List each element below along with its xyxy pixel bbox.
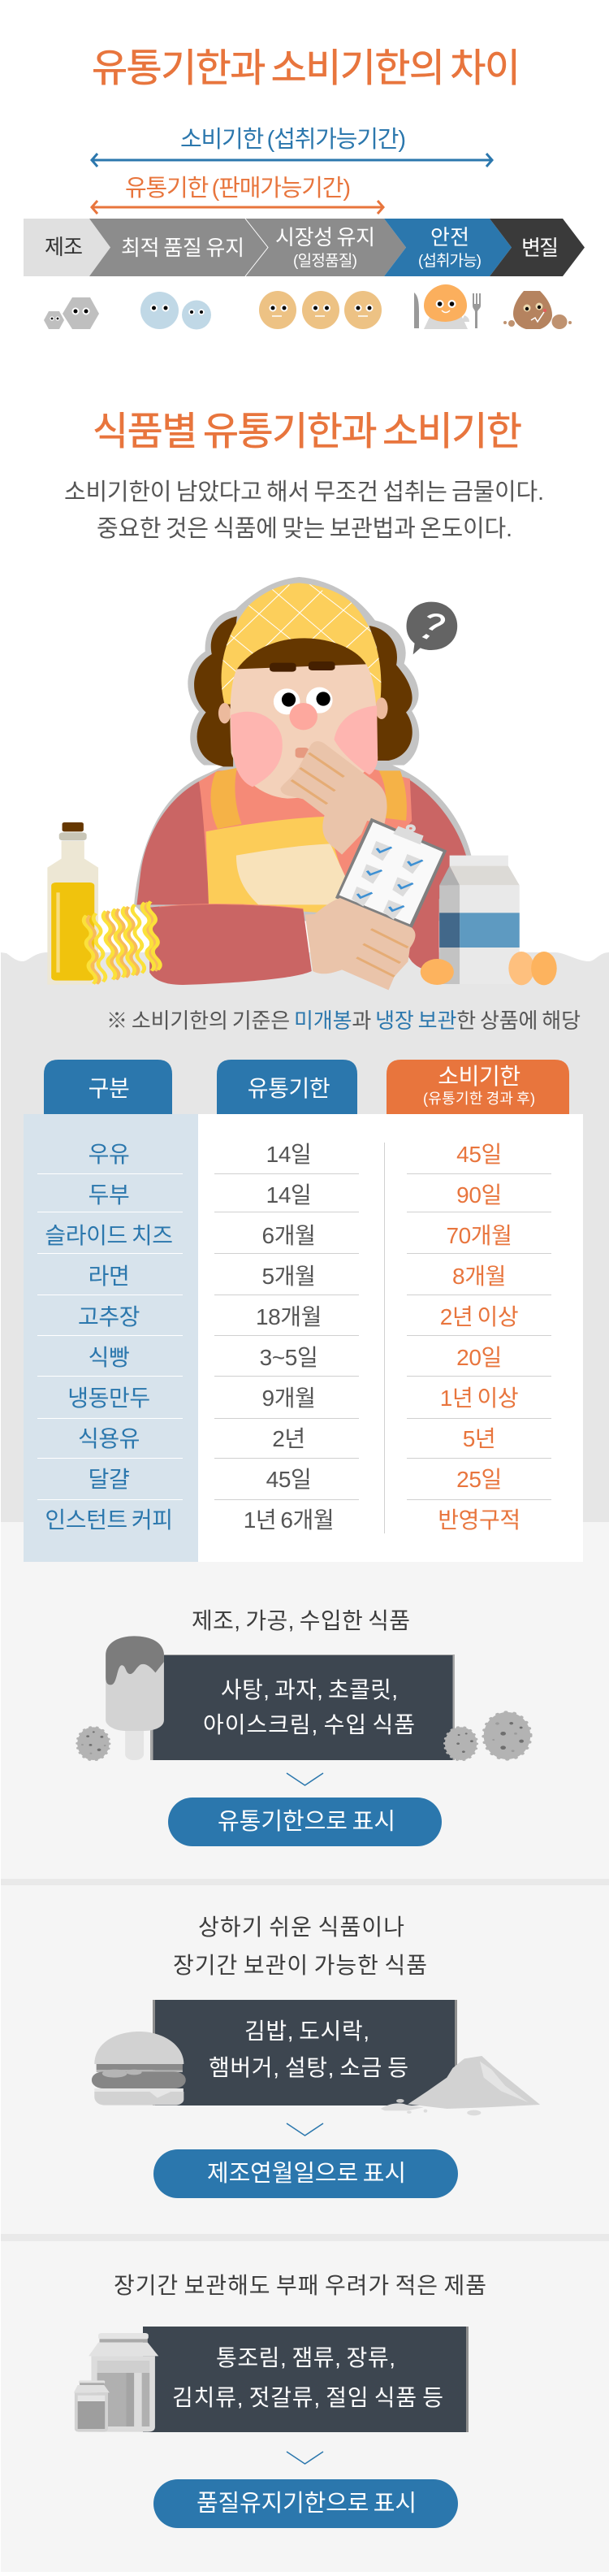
step: spoiled xyxy=(490,219,585,276)
divider band xyxy=(1,2234,609,2241)
column: consumption values: 8개월 xyxy=(452,1264,506,1289)
header: sell-by date xyxy=(217,1060,357,1114)
arrow: sell-by period xyxy=(92,201,383,214)
step: manufacture: 제조 xyxy=(45,235,83,259)
board text xyxy=(209,2019,408,2080)
column: consumption values: 2년 이상 xyxy=(440,1304,518,1329)
pill: sell-by label: 유통기한으로 표시 xyxy=(218,1809,395,1835)
icon: hexagon ingredients xyxy=(44,297,99,329)
board text: 김밥, 도시락, xyxy=(244,2019,369,2044)
column: consumption values: 45일 xyxy=(456,1142,502,1167)
header: consumption date: 소비기한 xyxy=(438,1064,520,1089)
column: consumption values: 5년 xyxy=(463,1426,495,1451)
header: sell-by date: 유통기한 xyxy=(248,1076,330,1101)
column: foods: 식빵 xyxy=(89,1345,129,1370)
board xyxy=(150,1654,455,1760)
step: best quality xyxy=(89,219,268,276)
column: sell-by values: 9개월 xyxy=(262,1386,315,1411)
intro text: 중요한 것은 식품에 맞는 보관법과 온도이다. xyxy=(97,516,512,542)
step: spoiled: 변질 xyxy=(521,236,559,260)
timeline chevron bar xyxy=(24,219,585,276)
arrow: down chevron xyxy=(287,2123,323,2136)
column: sell-by values: 18개월 xyxy=(256,1304,322,1329)
label: sell-by date: 유통기한 (판매가능기간) xyxy=(125,176,351,202)
step: marketable xyxy=(245,219,406,276)
step: manufacture xyxy=(24,219,110,276)
column: foods: 냉동만두 xyxy=(67,1386,150,1411)
title: difference between dates: 유통기한과 소비기한의 차이 xyxy=(92,47,520,90)
oil bottle xyxy=(47,822,98,985)
board text: 통조림, 잼류, 장류, xyxy=(216,2345,395,2370)
header: category: 구분 xyxy=(89,1076,129,1101)
board xyxy=(143,2327,469,2432)
column: sell-by values: 3~5일 xyxy=(260,1345,317,1370)
clipboard with checklist xyxy=(335,818,447,929)
eggs xyxy=(421,952,557,985)
column: consumption values: 70개월 xyxy=(446,1223,512,1248)
ramen noodles xyxy=(84,901,160,984)
panel: manufacture date foods xyxy=(92,1915,540,2198)
step: marketable: 시장성 유지 xyxy=(275,225,375,249)
arrow: consumption period xyxy=(92,154,492,167)
step: marketable: (일정품질) xyxy=(293,252,357,270)
board text: 햄버거, 설탕, 소금 등 xyxy=(209,2055,408,2080)
milk carton xyxy=(439,856,520,984)
column: foods: 두부 xyxy=(89,1182,129,1208)
lower hand xyxy=(305,898,416,990)
panel background: gray wave xyxy=(1,952,609,1522)
step: safe xyxy=(384,219,512,276)
step: safe: (섭취가능) xyxy=(418,252,482,270)
label: consumption date: 소비기한 (섭취가능기간) xyxy=(180,127,406,153)
header: consumption date xyxy=(387,1060,569,1114)
icon: yellow neutral eggs xyxy=(259,291,382,329)
forearm sleeve xyxy=(149,904,312,985)
board text xyxy=(203,1677,415,1737)
column: foods: 고추장 xyxy=(78,1304,140,1329)
column: consumption values: 20일 xyxy=(456,1345,502,1370)
icon: spoiled brown blob xyxy=(503,291,572,329)
icon: ice cream xyxy=(106,1636,164,1760)
board text: 아이스크림, 수입 식품 xyxy=(203,1712,415,1737)
heading xyxy=(173,1915,427,1978)
heading: 상하기 쉬운 식품이나 xyxy=(198,1915,404,1940)
column: foods: 라면 xyxy=(89,1264,129,1289)
icon: salt pile xyxy=(381,2056,540,2115)
column: sell-by values: 14일 xyxy=(266,1142,311,1167)
table xyxy=(24,1060,583,1562)
column: foods: 식용유 xyxy=(78,1426,140,1451)
table body background xyxy=(24,1114,583,1562)
pill: manufacture date label: 제조연월일으로 표시 xyxy=(207,2160,406,2187)
step: safe: 안전 xyxy=(430,225,469,249)
heading: 장기간 보관해도 부패 우려가 적은 제품 xyxy=(114,2273,486,2298)
heading: 제조, 가공, 수입한 식품 xyxy=(192,1608,410,1633)
step: best quality: 최적 품질 유지 xyxy=(121,236,244,260)
column: consumption values: 90일 xyxy=(456,1182,502,1208)
panel background: light lower xyxy=(1,1522,609,2572)
icon: blue fresh blobs xyxy=(140,292,211,330)
pill: manufacture date label xyxy=(153,2149,458,2198)
section title: by food: 식품별 유통기한과 소비기한 xyxy=(93,410,522,453)
panel: quality date foods xyxy=(74,2273,486,2528)
intro text: 소비기한이 남았다고 해서 무조건 섭취는 금물이다. xyxy=(64,479,544,505)
speech bubble with question mark xyxy=(407,602,457,654)
column: foods: 인스턴트 커피 xyxy=(45,1507,173,1533)
board text: 사탕, 과자, 초콜릿, xyxy=(221,1677,398,1702)
upper hand xyxy=(280,741,387,855)
icon: jars xyxy=(74,2333,158,2432)
pill: sell-by label xyxy=(168,1798,442,1846)
column: sell-by values: 5개월 xyxy=(262,1264,315,1289)
footnote: ※ 소비기한의 기준은 미개봉과 냉장 보관한 상품에 해당 xyxy=(106,1008,581,1033)
head xyxy=(188,577,419,799)
illustration: woman checking a list with foods xyxy=(47,577,557,990)
column: sell-by values: 1년 6개월 xyxy=(244,1507,334,1533)
pill: quality date label: 품질유지기한으로 표시 xyxy=(197,2491,417,2517)
body xyxy=(134,762,472,970)
divider band xyxy=(1,1879,609,1885)
column: consumption values: 반영구적 xyxy=(438,1507,520,1533)
icon: burger xyxy=(92,2032,186,2105)
arms, clipboard and foods xyxy=(47,741,557,990)
column: consumption values: 25일 xyxy=(456,1467,502,1492)
column: sell-by values: 45일 xyxy=(266,1467,311,1492)
column: sell-by values: 14일 xyxy=(266,1182,311,1208)
column: sell-by values: 2년 xyxy=(272,1426,305,1451)
board text: 김치류, 젓갈류, 절임 식품 등 xyxy=(172,2385,443,2410)
column: foods: 달걀 xyxy=(89,1467,129,1492)
board text xyxy=(172,2345,443,2410)
column: foods: 슬라이드 치즈 xyxy=(45,1223,173,1248)
column: sell-by values xyxy=(244,1142,334,1533)
header: category xyxy=(44,1060,172,1114)
heading: 장기간 보관이 가능한 식품 xyxy=(173,1953,427,1978)
board xyxy=(153,2000,457,2105)
column: foods: 우유 xyxy=(89,1142,129,1167)
column: foods xyxy=(45,1142,173,1533)
column: consumption values: 1년 이상 xyxy=(440,1386,518,1411)
panel: sell-by date foods xyxy=(77,1608,530,1846)
arrow: down chevron xyxy=(287,2452,323,2464)
intro text xyxy=(64,479,544,542)
icon: cookies xyxy=(77,1712,530,1760)
column: consumption values xyxy=(438,1142,520,1533)
icon: orange egg with cutlery xyxy=(414,284,481,329)
header: consumption date: (유통기한 경과 후) xyxy=(423,1091,535,1107)
column: sell-by values: 6개월 xyxy=(262,1223,315,1248)
pill: quality date label xyxy=(153,2479,458,2528)
arrow: down chevron xyxy=(287,1773,323,1785)
